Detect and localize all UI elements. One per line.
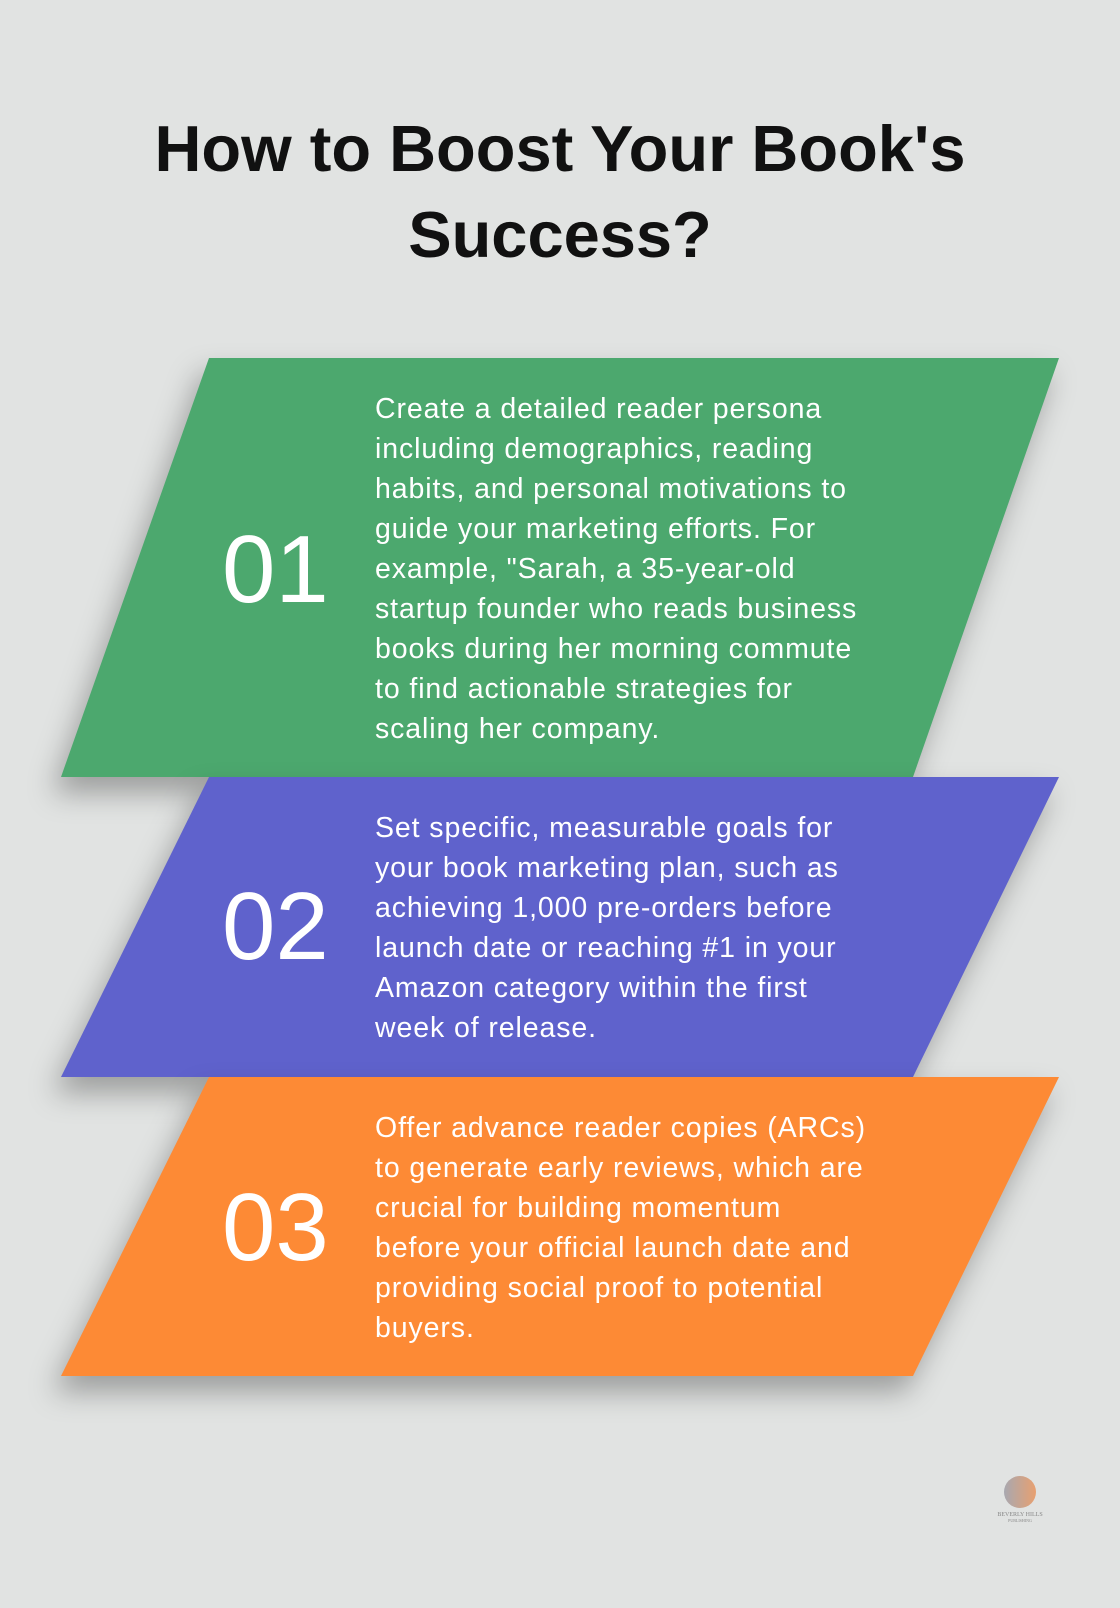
text step 3: to generate early reviews, which are — [375, 1152, 864, 1184]
logo: BEVERLY HILLS — [997, 1512, 1043, 1518]
panel: step 3 — [46, 1077, 1059, 1408]
title — [154, 112, 966, 271]
text step 3: crucial for building momentum — [375, 1192, 781, 1224]
number 03: 03 — [222, 1174, 329, 1281]
title: Success? — [408, 198, 712, 271]
text step 1: scaling her company. — [375, 713, 660, 745]
text step 2: Set specific, measurable goals for — [375, 812, 833, 844]
text step 1: books during her morning commute — [375, 633, 852, 665]
text step 3: providing social proof to potential — [375, 1272, 823, 1304]
text step 1: including demographics, reading — [375, 433, 813, 465]
title: How to Boost Your Book's — [154, 112, 966, 185]
logo: PUBLISHING — [1008, 1518, 1032, 1523]
text step 1: startup founder who reads business — [375, 593, 857, 625]
text step 3: before your official launch date and — [375, 1232, 851, 1264]
text step 2: week of release. — [375, 1012, 597, 1044]
panel: step 2 — [46, 777, 1059, 1109]
number 01: 01 — [222, 516, 329, 623]
number 02: 02 — [222, 873, 329, 980]
text step 3: Offer advance reader copies (ARCs) — [375, 1112, 866, 1144]
panel: step 1 — [44, 358, 1060, 809]
logo — [997, 1476, 1043, 1523]
text step 2: Amazon category within the first — [375, 972, 808, 1004]
text step 3: buyers. — [375, 1312, 475, 1344]
text step 1: Create a detailed reader persona — [375, 393, 822, 425]
text step 1: habits, and personal motivations to — [375, 473, 847, 505]
text step 3 — [375, 1112, 866, 1344]
text step 1 — [375, 393, 857, 745]
text step 1: example, "Sarah, a 35-year-old — [375, 553, 796, 585]
text step 2: achieving 1,000 pre-orders before — [375, 892, 832, 924]
text step 2 — [375, 812, 839, 1044]
text step 2: your book marketing plan, such as — [375, 852, 839, 884]
text step 2: launch date or reaching #1 in your — [375, 932, 837, 964]
text step 1: to find actionable strategies for — [375, 673, 793, 705]
text step 1: guide your marketing efforts. For — [375, 513, 816, 545]
